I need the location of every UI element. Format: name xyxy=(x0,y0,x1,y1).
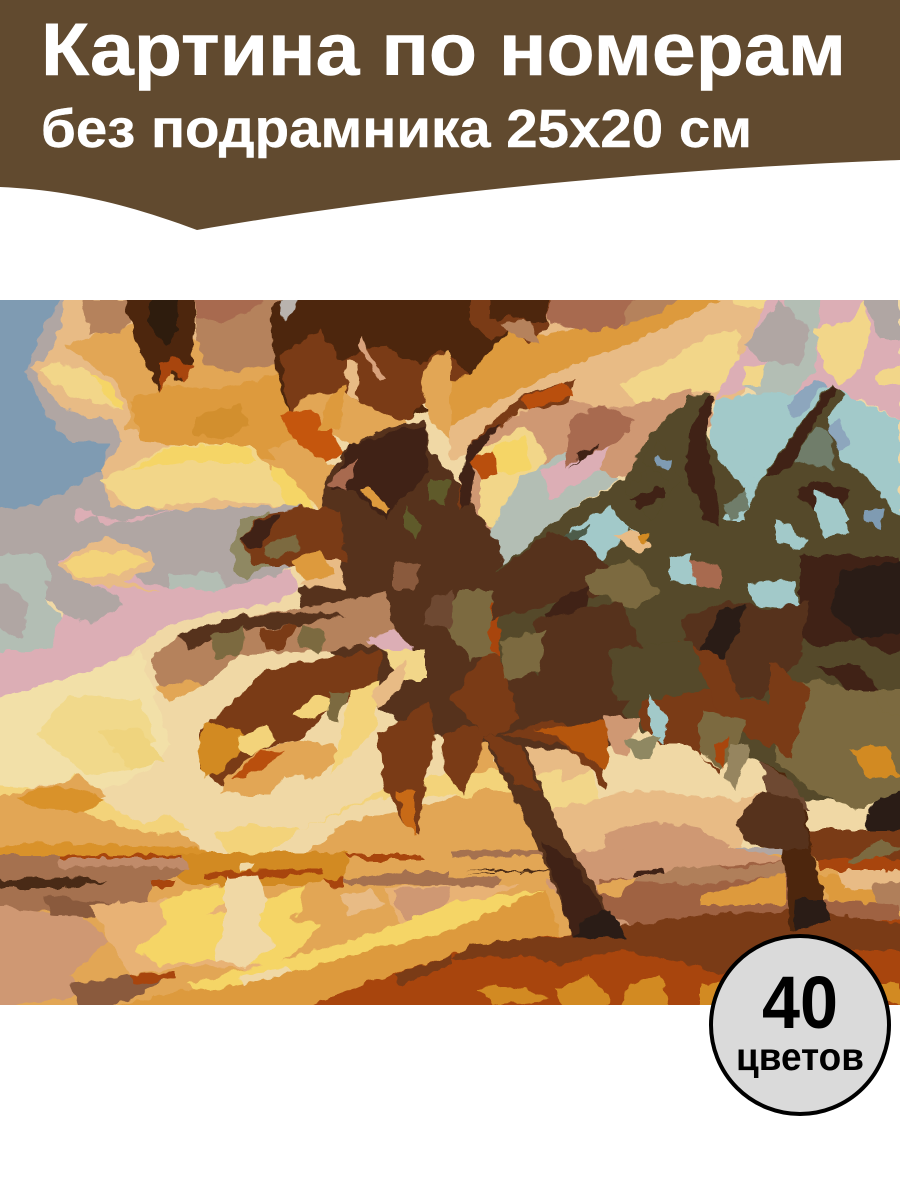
right palm: crown foliage xyxy=(490,383,900,865)
header banner xyxy=(0,0,900,230)
badge: 40 colours: 40 xyxy=(762,961,838,1044)
ground and sand xyxy=(300,848,900,1010)
subtitle: без подрамника 25х20 см xyxy=(41,99,752,159)
title: Картина по номерам xyxy=(41,8,846,91)
painting: palm trees at sunset xyxy=(0,290,900,1010)
trunks xyxy=(483,735,832,938)
sky: left clouds xyxy=(0,290,315,705)
background: lower sky and horizon glow xyxy=(0,650,790,862)
badge: 40 colours: цветов xyxy=(736,1036,864,1079)
left palm: crown and fronds xyxy=(150,380,640,835)
sky: right clouds xyxy=(440,290,900,575)
left palm: top fronds xyxy=(122,290,550,510)
sea and reflection xyxy=(0,853,900,1010)
badge: 40 colours xyxy=(711,936,889,1114)
